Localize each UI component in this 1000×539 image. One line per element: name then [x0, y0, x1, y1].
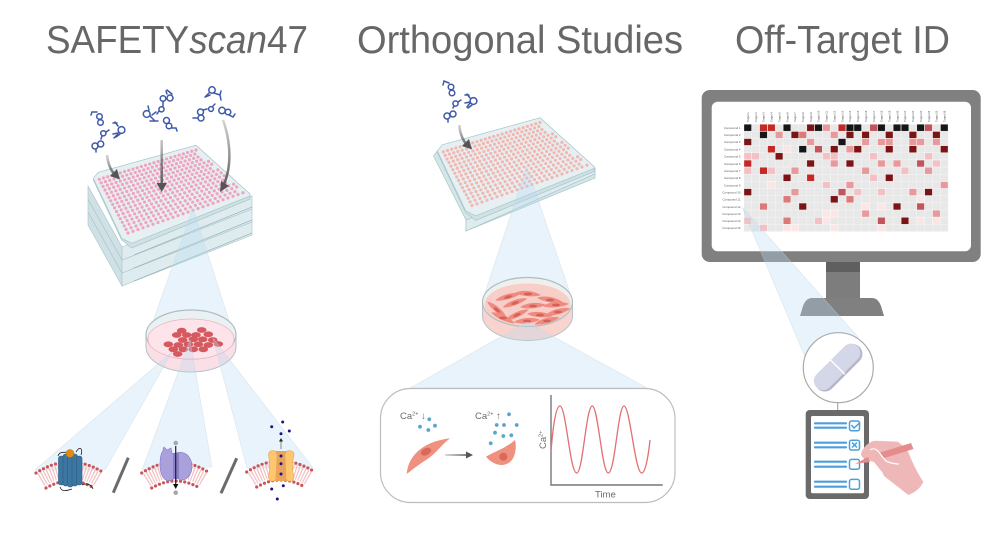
heatmap column labels: Target 26	[942, 110, 946, 122]
heatmap row labels: Compound 5	[724, 155, 741, 159]
stacked well plates	[88, 145, 252, 286]
heatmap row labels: Compound 8	[724, 176, 741, 180]
icon: activated cell	[486, 440, 516, 465]
chart: calcium oscillation: Time	[595, 490, 616, 500]
heatmap column labels: Target 15	[856, 110, 860, 122]
arrow: compound to plate, right	[220, 120, 229, 192]
heatmap row labels: Compound 1	[724, 126, 741, 130]
panel: Orthogonal Studies workflow	[380, 81, 675, 502]
heatmap column labels: Target 1	[746, 112, 750, 122]
heatmap column labels: Target 8	[801, 112, 805, 122]
heatmap column labels: Target 25	[935, 110, 939, 122]
single well plate	[434, 118, 595, 231]
heatmap row labels: Compound 14	[722, 219, 741, 223]
heatmap column labels: Target 12	[832, 110, 836, 122]
heatmap column labels	[746, 110, 946, 122]
panel: Off-Target ID	[702, 90, 981, 499]
petri dish with cells	[146, 310, 236, 372]
molecules: centre cluster	[143, 90, 177, 131]
heatmap column labels: Target 13	[840, 110, 844, 122]
heatmap column labels: Target 11	[825, 110, 829, 122]
heatmap column labels: Target 10	[817, 110, 821, 122]
icon: pill in circle	[803, 333, 873, 403]
callout box: calcium assay	[380, 388, 675, 502]
heatmap column labels: Target 20	[895, 110, 899, 122]
heatmap column labels: Target 2	[754, 112, 758, 122]
heatmap column labels: Target 16	[864, 110, 868, 122]
heatmap row labels: Compound 12	[722, 205, 741, 209]
heatmap row labels: Compound 9	[724, 183, 741, 187]
connector line	[837, 402, 839, 410]
heatmap column labels: Target 3	[762, 112, 766, 122]
transporter in membrane with ions	[247, 420, 315, 500]
heatmap column labels: Target 18	[880, 110, 884, 122]
magnification beam: plate to dish	[150, 208, 232, 330]
heatmap row labels: Compound 2	[724, 133, 741, 137]
heatmap column labels: Target 17	[872, 110, 876, 122]
heatmap column labels: Target 6	[785, 112, 789, 122]
heatmap	[722, 110, 948, 232]
title: Off-Target ID: Off-Target ID	[735, 19, 950, 62]
chart: calcium oscillation	[538, 395, 663, 500]
heatmap column labels: Target 24	[927, 110, 931, 122]
chart: calcium oscillation: Ca	[538, 437, 549, 449]
heatmap column labels: Target 14	[848, 110, 852, 122]
label: calcium low: 2+	[412, 412, 418, 418]
heatmap column labels: Target 19	[888, 110, 892, 122]
panel: SAFETYscan47 workflow	[35, 87, 315, 501]
calcium dots, low	[418, 417, 437, 432]
chart: calcium oscillation: 2+	[538, 431, 544, 437]
heatmap column labels: Target 22	[911, 110, 915, 122]
arrow: cell transition	[445, 452, 473, 458]
heatmap row labels: Compound 15	[722, 226, 741, 230]
label: calcium high: Ca	[475, 411, 487, 422]
GPCR receptor in membrane	[36, 448, 104, 491]
icon: elongated cell	[407, 438, 450, 474]
heatmap column labels: Target 9	[809, 112, 813, 122]
heatmap row labels: Compound 11	[723, 198, 741, 202]
molecules: right cluster	[193, 87, 235, 121]
heatmap row labels: Compound 13	[722, 212, 741, 216]
divider slash 2	[221, 458, 237, 493]
heatmap column labels: Target 23	[919, 110, 923, 122]
divider slash 1	[113, 458, 128, 493]
molecules cluster	[443, 81, 477, 122]
magnification beam: dish to channel	[142, 340, 212, 470]
arrow: compound to plate, left	[107, 155, 120, 180]
heatmap column labels: Target 4	[770, 112, 774, 122]
icon: checklist clipboard	[806, 410, 869, 499]
label: calcium low: ↓	[418, 411, 426, 422]
heatmap row labels: Compound 10	[722, 190, 741, 194]
label: calcium low: Ca	[400, 411, 412, 422]
heatmap row labels: Compound 7	[724, 169, 741, 173]
molecules: left cluster	[91, 112, 125, 152]
magnification beam: dish to transporter	[213, 338, 313, 468]
ion channel in membrane	[142, 441, 210, 495]
icon: hand holding pen	[855, 441, 923, 495]
title: SAFETYscan47: SAFETYscan47	[46, 19, 308, 62]
monitor	[702, 90, 981, 316]
magnification beam: dish to receptor	[35, 352, 172, 470]
magnification beam: heatmap to pill	[742, 207, 858, 357]
heatmap row labels	[722, 126, 741, 230]
heatmap column labels: Target 5	[777, 112, 781, 122]
heatmap row labels: Compound 6	[724, 162, 741, 166]
heatmap row labels: Compound 3	[724, 140, 741, 144]
magnification beam: dish to calcium box	[410, 322, 647, 388]
heatmap row labels: Compound 4	[724, 147, 741, 151]
petri dish with fibroblasts	[482, 278, 572, 340]
calcium dots, high	[489, 412, 519, 445]
arrow: compound to plate, centre	[156, 140, 167, 192]
magnification beam: plate to dish	[484, 167, 571, 296]
title: Orthogonal Studies: Orthogonal Studies	[357, 19, 683, 62]
heatmap column labels: Target 21	[903, 110, 907, 122]
label: calcium high: ↑	[493, 411, 501, 422]
label: calcium high: 2+	[487, 412, 493, 418]
arrow: compound to plate	[459, 125, 472, 150]
heatmap column labels: Target 7	[793, 112, 797, 122]
